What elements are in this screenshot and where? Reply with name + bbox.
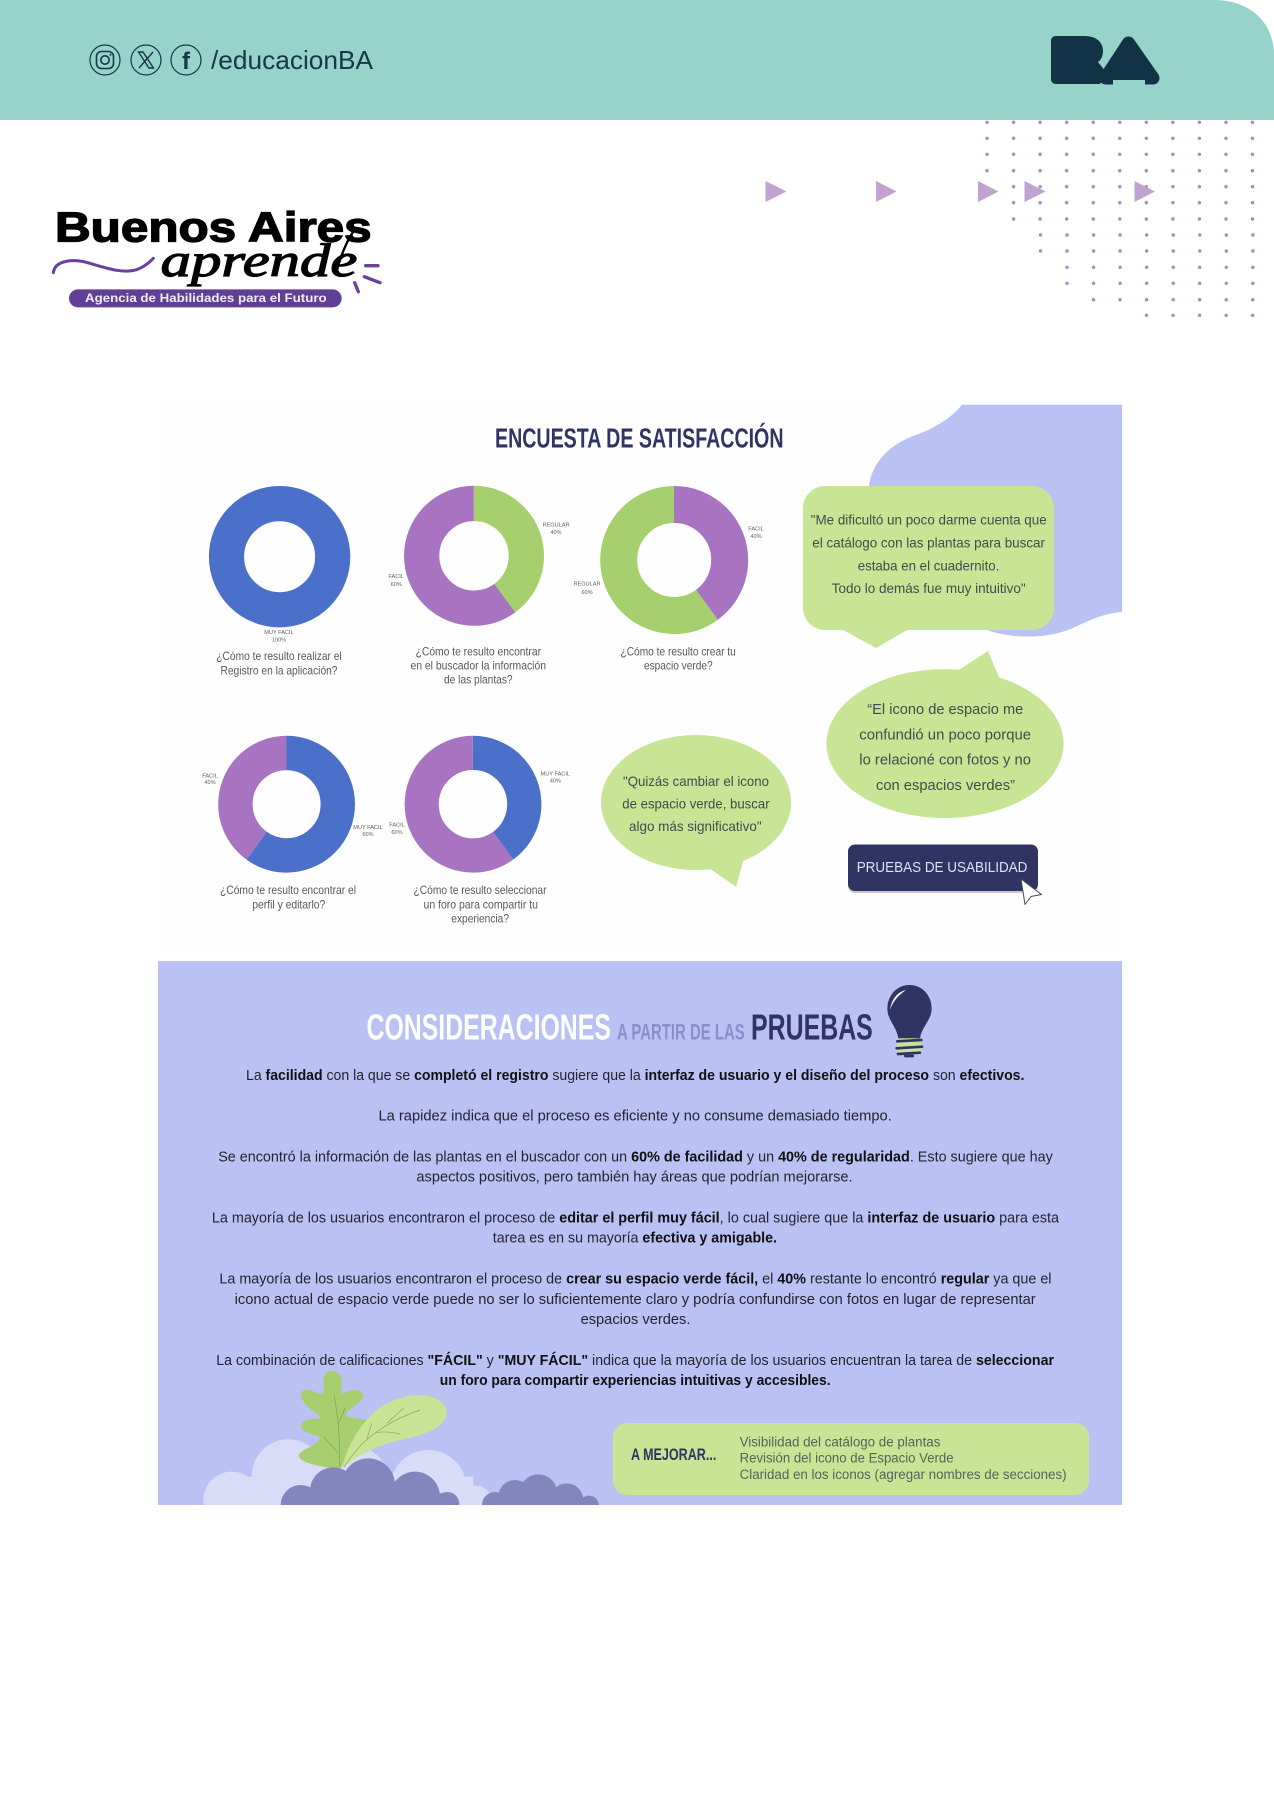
icon: cursor: [1021, 879, 1042, 904]
logo tagline pill: [69, 289, 342, 307]
donut 2: [388, 503, 570, 686]
section heading: PRUEBAS: [751, 1006, 873, 1047]
light clouds: [203, 1440, 490, 1505]
quote bubble 3: [601, 735, 791, 887]
question 4: perfil y editarlo?: [252, 897, 326, 911]
paragraph 6: La combinación de calificaciones "FÁCIL" y "MUY FÁCIL" indica que la mayoría de los usuarios encuentran la tarea de seleccionar: [216, 1352, 1054, 1369]
section heading: [366, 1006, 873, 1047]
question 5: [414, 883, 546, 925]
donut 2: FACIL: [388, 574, 404, 580]
icon: light bulb: [887, 985, 932, 1057]
paragraph 3: [218, 1148, 1053, 1186]
donut 2: REGULAR: [542, 523, 570, 529]
question 1: Registro en la aplicación?: [220, 663, 338, 677]
usability button: [848, 844, 1042, 904]
donut 5: [389, 753, 570, 925]
donut 5: MUY FACIL: [541, 771, 570, 777]
paragraph 4: tarea es en su mayoría efectiva y amigable.: [493, 1230, 777, 1247]
dark bush: [280, 1458, 460, 1505]
survey title: ENCUESTA DE SATISFACCIÓN: [495, 422, 784, 454]
quote bubble 2: “El icono de espacio me: [867, 701, 1023, 718]
rounded leaf: [342, 1395, 447, 1468]
quote bubble 1: [803, 486, 1054, 648]
social handle: /educacionBA: [211, 45, 374, 75]
plant illustration: [203, 1371, 599, 1505]
donut 2: 40%: [550, 530, 562, 536]
quote bubble 2: lo relacioné con fotos y no: [859, 752, 1031, 768]
question 2: de las plantas?: [444, 672, 513, 686]
icon: facebook: f: [182, 48, 191, 75]
quote bubble 1: estaba en el cuadernito.: [858, 558, 999, 574]
header band: [0, 0, 1274, 120]
logo tagline pill: Agencia de Habilidades para el Futuro: [85, 291, 327, 305]
question 2: [410, 644, 546, 686]
donut 3: FACIL: [748, 527, 764, 533]
question 3: espacio verde?: [644, 658, 713, 672]
donut 1: [216, 504, 342, 677]
donut 3: [573, 504, 764, 672]
icon: x: [131, 45, 161, 75]
arrow triangles: [766, 181, 1155, 202]
donut 4: 60%: [362, 832, 374, 838]
paragraph 5: icono actual de espacio verde puede no ser lo suficientemente claro y podría confundirse con fotos en lugar de representar: [235, 1291, 1036, 1308]
panel: consideraciones: [158, 961, 1122, 1533]
donut 3: 40%: [750, 534, 762, 540]
quote bubble 3: algo más significativo": [629, 818, 762, 834]
panel: encuesta de satisfaccion: [158, 404, 1122, 950]
social icons and handle: [90, 45, 374, 75]
section heading: A PARTIR DE LAS: [617, 1019, 745, 1044]
paragraph 5: [219, 1270, 1051, 1328]
paragraph 1: La facilidad con la que se completó el registro sugiere que la interfaz de usuario y el diseño del proceso son efectivos.: [246, 1067, 1024, 1084]
question 2: en el buscador la información: [410, 658, 546, 672]
improvements list: Revisión del icono de Espacio Verde: [740, 1451, 954, 1466]
question 5: ¿Cómo te resulto seleccionar: [414, 883, 546, 897]
BA logo: [1051, 36, 1153, 86]
section heading: CONSIDERACIONES: [366, 1006, 611, 1047]
improvements box: [613, 1423, 1089, 1495]
donut 1: 100%: [272, 638, 286, 644]
icon: facebook: [171, 45, 201, 75]
quote bubble 1: Todo lo demás fue muy intuitivo": [832, 580, 1026, 596]
question 3: ¿Cómo te resulto crear tu: [620, 644, 736, 658]
quote bubble 2: [826, 651, 1064, 818]
question 5: experiencia?: [451, 911, 509, 925]
logo wordmark: Buenos Aires: [55, 203, 372, 250]
donut 4: FACIL: [202, 773, 218, 779]
decorative blob: [869, 405, 1122, 637]
donut 5: FACIL: [389, 823, 405, 829]
paragraph 2: La rapidez indica que el proceso es eficiente y no consume demasiado tiempo.: [378, 1108, 892, 1125]
improvements list: Claridad en los iconos (agregar nombres de secciones): [740, 1467, 1067, 1482]
considerations text: [212, 1067, 1060, 1389]
question 4: [220, 883, 356, 911]
paragraph 6: un foro para compartir experiencias intuitivas y accesibles.: [440, 1372, 831, 1389]
improvements box: A MEJORAR...: [631, 1445, 716, 1464]
paragraph 6: [216, 1352, 1054, 1389]
quote bubble 2: con espacios verdes”: [876, 777, 1015, 794]
question 4: ¿Cómo te resulto encontrar el: [220, 883, 356, 897]
donut 4: [202, 753, 383, 911]
improvements list: [740, 1435, 1067, 1482]
oak leaf veins: [323, 1395, 345, 1467]
dot pattern: [987, 122, 1254, 315]
quote bubble 3: de espacio verde, buscar: [622, 795, 770, 811]
question 3: [620, 644, 736, 672]
logo swash: [53, 258, 153, 273]
donut 4: 40%: [204, 780, 216, 786]
logo script ascender: [336, 228, 356, 274]
icon: instagram: [90, 45, 120, 75]
donut 4: MUY FACIL: [353, 825, 383, 831]
logo script word: aprende: [161, 235, 357, 287]
question 5: un foro para compartir tu: [424, 897, 538, 911]
question 1: [216, 649, 342, 677]
paragraph 5: La mayoría de los usuarios encontraron el proceso de crear su espacio verde fácil, el 40% restante lo encontró regular ya que el: [219, 1270, 1051, 1287]
question 2: ¿Cómo te resulto encontrar: [416, 644, 541, 658]
donut 5: 40%: [550, 778, 561, 784]
donut 3: REGULAR: [573, 581, 601, 587]
usability button: PRUEBAS DE USABILIDAD: [857, 859, 1028, 876]
rounded leaf veins: [344, 1408, 420, 1467]
donut 5: 60%: [391, 830, 403, 836]
improvements list: Visibilidad del catálogo de plantas: [740, 1435, 941, 1450]
quote bubble 3: "Quizás cambiar el icono: [623, 773, 769, 789]
quote bubble 2: confundió un poco porque: [859, 726, 1031, 744]
donut 2: 60%: [391, 582, 402, 588]
paragraph 4: La mayoría de los usuarios encontraron el proceso de editar el perfil muy fácil, lo cual sugiere que la interfaz de usuario para esta: [212, 1209, 1060, 1226]
logo: Buenos Aires aprende: [53, 203, 380, 307]
donut 3: 60%: [581, 590, 593, 596]
paragraph 3: aspectos positivos, pero también hay áreas que podrían mejorarse.: [416, 1169, 853, 1186]
donut 1: MUY FACIL: [264, 630, 294, 636]
quote bubble 1: "Me dificultó un poco darme cuenta que: [811, 512, 1047, 528]
oak leaf: [299, 1371, 368, 1469]
paragraph 4: [212, 1209, 1060, 1247]
question 1: ¿Cómo te resulto realizar el: [216, 649, 342, 663]
paragraph 3: Se encontró la información de las plantas en el buscador con un 60% de facilidad y un 40% de regularidad. Esto sugiere que hay: [218, 1148, 1053, 1165]
quote bubble 1: el catálogo con las plantas para buscar: [812, 534, 1045, 550]
paragraph 5: espacios verdes.: [581, 1311, 690, 1328]
logo sparks: [355, 266, 380, 292]
small dark bush: [482, 1474, 599, 1505]
